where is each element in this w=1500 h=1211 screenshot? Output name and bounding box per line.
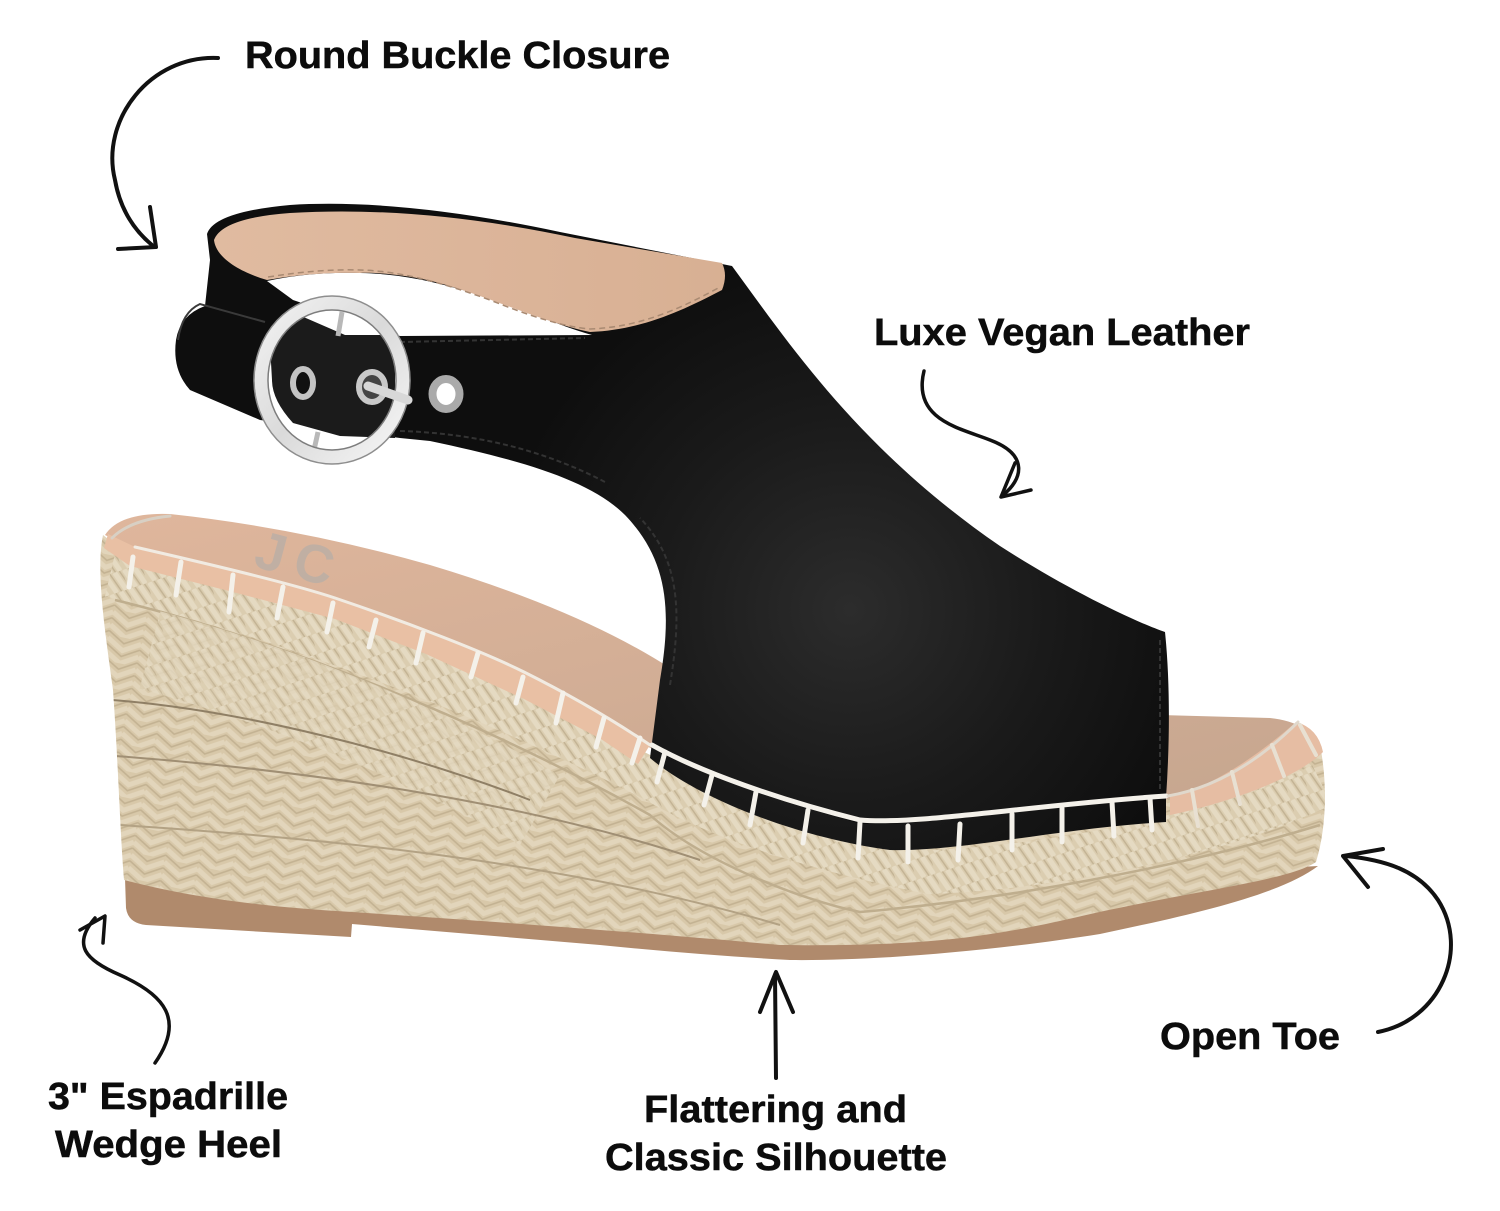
callout: espadrille wedge heel (48, 916, 288, 1166)
label: open toe: Open Toe (1160, 1016, 1340, 1058)
strap opening (267, 273, 592, 336)
rope band under welt (110, 575, 1322, 872)
sandal illustration (90, 204, 1340, 970)
interior lining (214, 211, 725, 332)
label: luxe vegan leather: Luxe Vegan Leather (874, 312, 1250, 354)
strap highlights (178, 304, 265, 340)
callout: round buckle closure (112, 35, 670, 249)
arrow: to toe (1343, 849, 1451, 1032)
insole (105, 514, 1322, 800)
stitched welt (112, 516, 1316, 862)
arrow: to sole (760, 972, 793, 1078)
label: espadrille wedge heel: 3" Espadrille (48, 1076, 288, 1118)
arrow: to heel (80, 916, 169, 1063)
round buckle (254, 296, 410, 464)
insole logo: JC (249, 520, 350, 601)
jute wedge (100, 535, 1325, 946)
callout: luxe vegan leather (874, 312, 1250, 497)
outsole (125, 866, 1318, 960)
arrow: to upper (922, 371, 1031, 497)
peach welt (104, 534, 650, 764)
arrow: to buckle strap (112, 58, 218, 249)
callout: espadrille wedge heel: Wedge Heel (55, 1124, 282, 1166)
callout: flattering silhouette (605, 972, 947, 1179)
leather heel strap and upper (175, 204, 1169, 850)
callout: flattering silhouette: Classic Silhouette (605, 1137, 947, 1179)
label: round buckle closure: Round Buckle Closure (245, 35, 670, 77)
callout: open toe (1160, 849, 1451, 1058)
label: flattering silhouette: Flattering and (644, 1089, 907, 1131)
strap eyelet (432, 379, 460, 409)
